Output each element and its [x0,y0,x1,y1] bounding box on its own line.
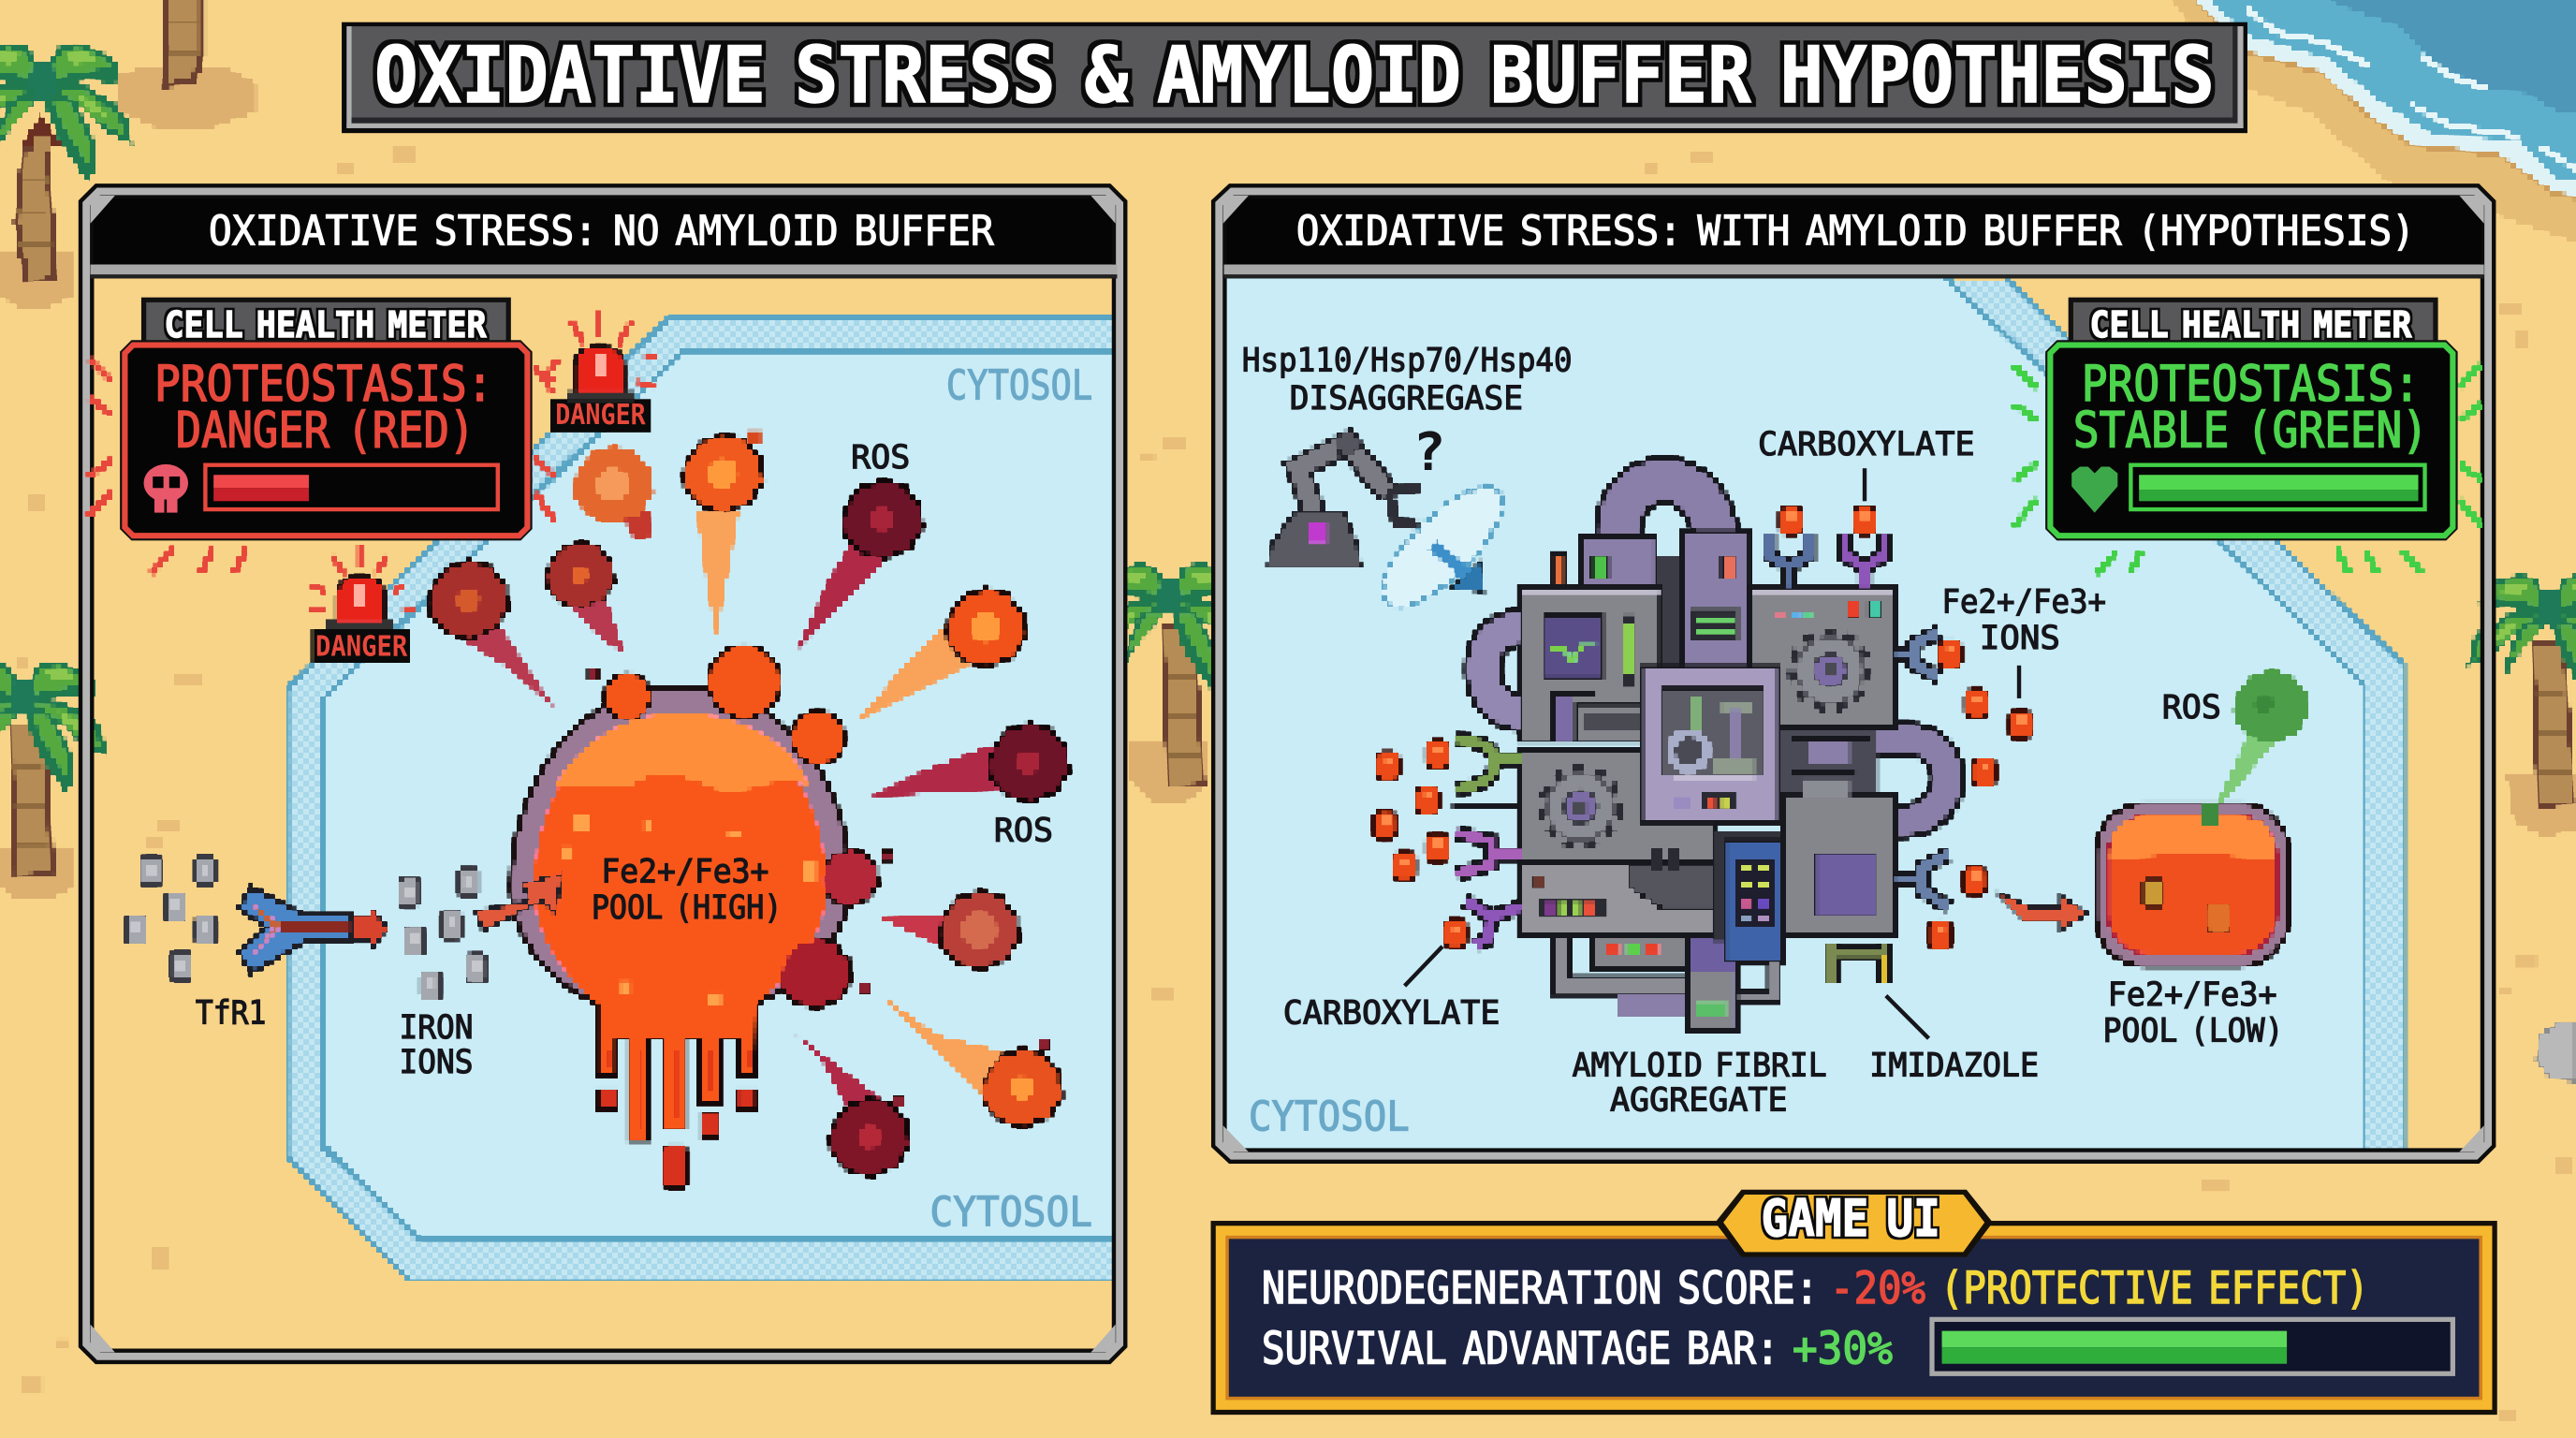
rock [2537,1022,2576,1081]
red meter [120,298,533,540]
ROS labels: ROS [851,438,910,477]
red meter status: DANGER (RED) [176,402,475,459]
low pool label [2103,976,2284,1050]
green meter status: PROTEOSTASIS: [2082,356,2420,413]
robot arm disaggregase [1268,433,1419,567]
cytosol labels [929,361,1410,1236]
disaggregase label: DISAGGREGASE [1290,379,1523,418]
cytosol labels: CYTOSOL [929,1188,1092,1236]
bottom modules [1592,930,1687,970]
meter title right: CELL HEALTH METER [2089,304,2412,346]
aggregate disk with blue arrow [1366,471,1519,624]
pipes [1483,480,1948,996]
iron ions label [399,1008,473,1081]
palm trunk: top centre-left [118,0,256,128]
health meters and game UI [120,298,2497,1415]
palm: top-left [0,43,133,307]
palm: between panels [1087,562,1252,805]
question mark: ? [1412,422,1445,483]
low pool label: POOL (LOW) [2103,1012,2284,1050]
high pool label: POOL (HIGH) [592,888,782,927]
cytosol labels: CYTOSOL [1249,1093,1410,1141]
title bar [342,22,2247,133]
ocean and foam [2169,0,2576,243]
neurodegeneration score [1262,1263,2369,1314]
left panel frame [86,191,1120,1357]
green meter status: STABLE (GREEN) [2073,402,2428,459]
arrow to low iron pool [1996,892,2086,930]
survival advantage: +30% [1793,1324,1893,1375]
survival bar [1932,1319,2452,1373]
high pool label [592,852,782,927]
survival advantage: SURVIVAL ADVANTAGE BAR: [1262,1324,1779,1375]
title: OXIDATIVE STRESS & AMYLOID BUFFER HYPOTHESIS [374,31,2215,121]
alarm rays around red meter [89,359,555,574]
cytosol zones [287,276,2404,1282]
ROS labels: ROS [994,812,1053,850]
high pool label: Fe2+/Fe3+ [601,852,768,890]
amyloid fibril label [1573,1047,1827,1119]
amyloid fibril aggregate machine [1453,480,1949,1032]
iron ions label right with leader: Fe2+/Fe3+ [1942,583,2106,622]
iron ions label: IONS [399,1043,473,1081]
neurodegeneration score: -20% [1830,1263,1925,1314]
disaggregase label [1242,342,1573,418]
palm: right edge [2466,574,2576,838]
game UI panel [1211,1190,2497,1415]
iron ions inside left cell [399,869,487,1000]
backing for the machine core [1658,555,1684,668]
iron ions outside left cell [126,857,215,980]
dark strut [1453,805,1521,809]
iron ions label right with leader [1942,583,2106,698]
meter title left: CELL HEALTH METER [165,304,487,346]
left cell: cytosol and membrane [287,317,1117,1282]
amyloid fibril label: AMYLOID FIBRIL [1573,1047,1827,1085]
iron ions bound to the machine [1373,506,2032,949]
icon: skull [144,464,188,513]
ROS labels: ROS [2162,688,2221,726]
imidazole label with leader [1869,996,2039,1085]
cytosol labels: CYTOSOL [946,361,1092,409]
left panel heading: OXIDATIVE STRESS: NO AMYLOID BUFFER [209,208,994,256]
danger labels: DANGER [555,399,646,432]
red meter status [154,356,493,459]
disaggregase label: Hsp110/Hsp70/Hsp40 [1242,342,1573,380]
green ROS with tail [2213,669,2309,814]
iron pool low: small sphere [2097,801,2289,966]
game UI tab label: GAME UI [1761,1189,1940,1248]
danger siren upper [542,312,657,431]
neurodegeneration score: (PROTECTIVE EFFECT) [1940,1263,2369,1314]
right cell: cytosol and membrane [1225,276,2404,1151]
alarm rays around green meter [2014,365,2481,574]
danger siren lower [309,546,414,662]
iron ions label: IRON [399,1008,473,1047]
carboxylate label top with leader: CARBOXYLATE [1758,425,1975,463]
danger labels [315,399,646,663]
ROS bursts with tails [429,431,1070,1177]
danger labels: DANGER [315,630,407,663]
claws [1457,536,1949,983]
arrow into iron pool [476,874,562,930]
iron pool high: swollen bursting sphere [511,646,879,1188]
palm: left edge [0,661,109,901]
right panel heading: OXIDATIVE STRESS: WITH AMYLOID BUFFER (HYPOTHESIS) [1296,208,2415,256]
amyloid fibril label: AGGREGATE [1610,1080,1788,1119]
iron ions label right with leader: IONS [1980,619,2060,657]
carboxylate label bottom with leader [1283,946,1500,1032]
red meter status: PROTEOSTASIS: [154,356,493,413]
icon: TfR1 receptor [240,888,388,973]
icon: heart [2071,466,2117,513]
illustrations [89,312,2481,1188]
neurodegeneration score: NEURODEGENERATION SCORE: [1262,1263,1819,1314]
right panel frame [1219,191,2488,1156]
low pool label: Fe2+/Fe3+ [2108,976,2277,1014]
imidazole label with leader: IMIDAZOLE [1869,1047,2039,1085]
TfR1 label: TfR1 [196,993,266,1032]
carboxylate label bottom with leader: CARBOXYLATE [1283,993,1500,1032]
ROS labels [851,438,2221,850]
green meter status [2073,356,2428,459]
green meter [2045,298,2458,540]
